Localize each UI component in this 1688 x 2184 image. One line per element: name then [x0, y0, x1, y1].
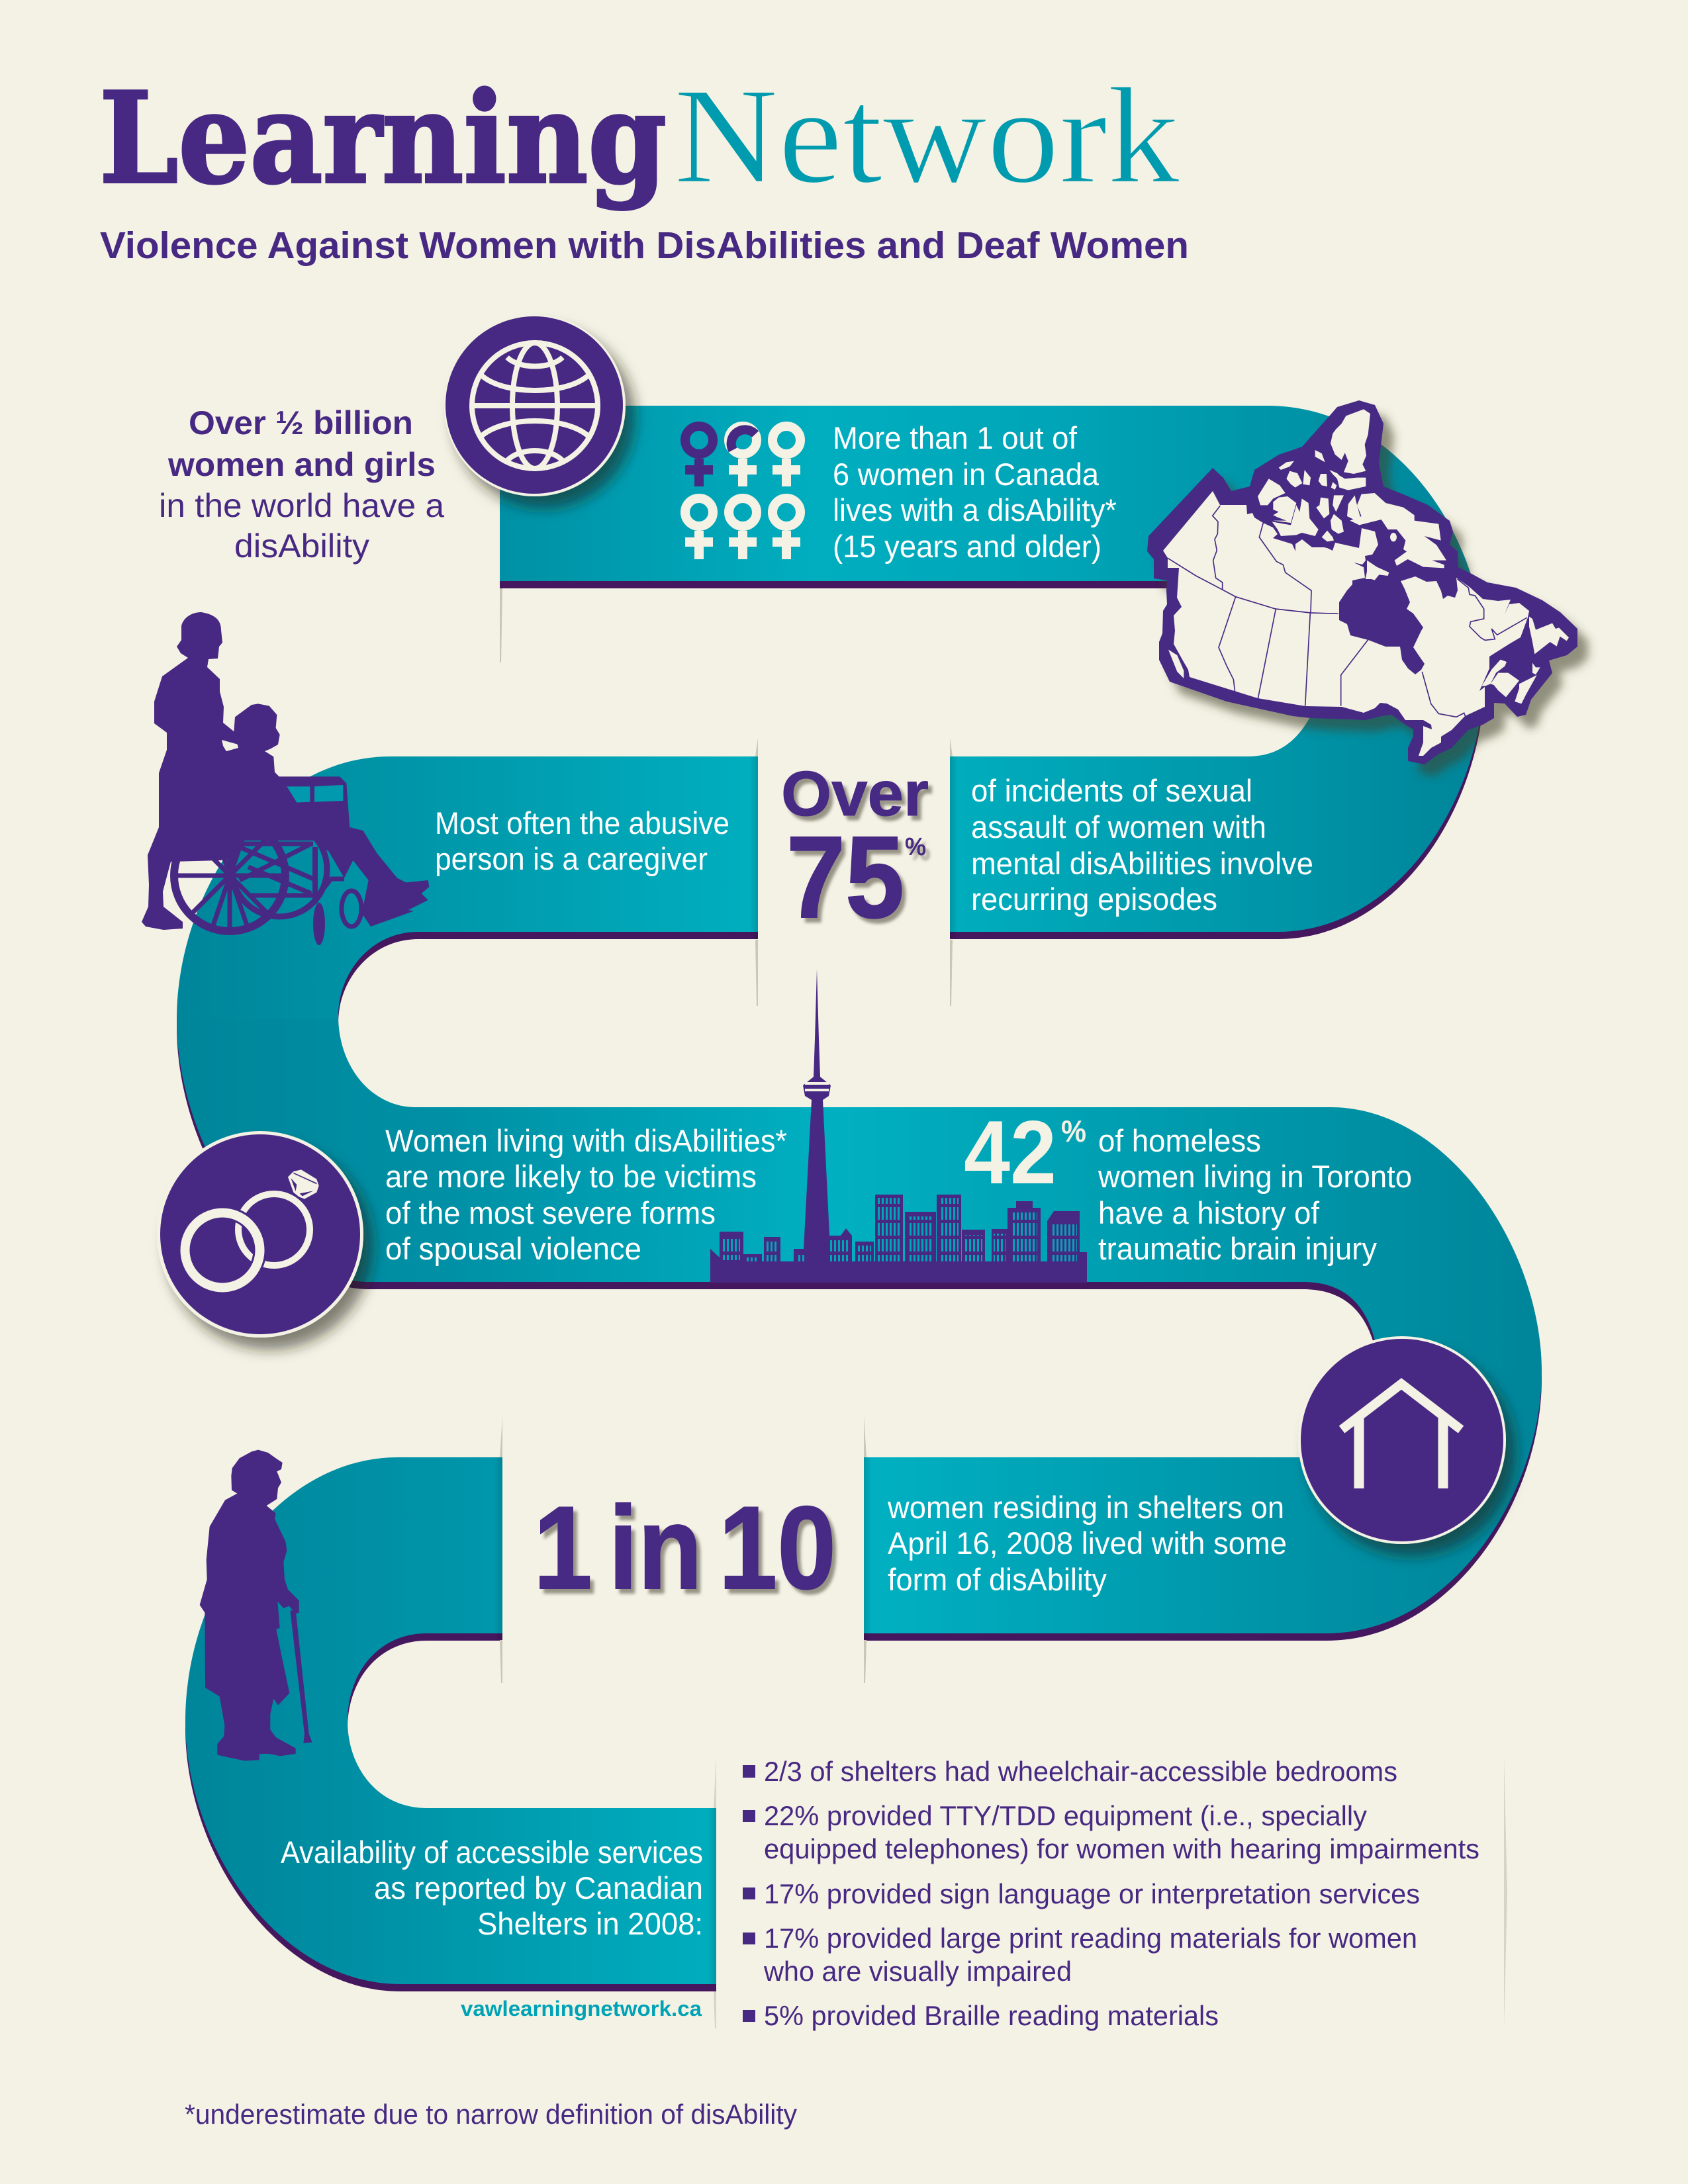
list: accessible services: 17% provided large print reading materials for women: [764, 1923, 1417, 1954]
text: abusive person is a caregiver: [435, 805, 729, 876]
text: spousal violence: [385, 1123, 787, 1266]
text: spousal violence: are more likely to be victims: [385, 1159, 757, 1194]
title: Learning: [99, 65, 667, 212]
text: sexual assault recurring episodes: recurring episodes: [971, 882, 1217, 917]
text: availability of accessible services: Shelters in 2008:: [477, 1906, 703, 1941]
text: sexual assault recurring episodes: of incidents of sexual: [971, 773, 1252, 808]
footnote: *underestimate due to narrow definition of disAbility: [185, 2099, 797, 2130]
intro text: half a billion women: women and girls: [167, 446, 436, 483]
text: homeless women in Toronto: of homeless: [1098, 1123, 1261, 1158]
paper cut column: 1 in 10: [494, 1416, 872, 1683]
shadow below first band: [500, 588, 502, 662]
text: women residing in shelters: April 16, 2008 lived with some: [888, 1525, 1287, 1561]
text: abusive person is a caregiver: Most often the abusive: [435, 805, 729, 841]
text: availability of accessible services: as reported by Canadian: [374, 1870, 703, 1905]
stat: 42 percent: %: [1061, 1114, 1086, 1148]
icon: six female symbols, one highlighted: [685, 426, 800, 559]
intro text: half a billion women: in the world have a: [159, 487, 444, 524]
paper cut column: services list: [708, 1757, 1507, 2028]
text: women residing in shelters: form of disAbility: [888, 1562, 1107, 1597]
text: homeless women in Toronto: traumatic brain injury: [1098, 1231, 1377, 1266]
paper cut column: over 75: [750, 738, 958, 1019]
text: abusive person is a caregiver: person is a caregiver: [435, 841, 708, 876]
title: [99, 60, 1180, 212]
caregiver: [142, 612, 238, 930]
list: accessible services: 2/3 of shelters had wheelchair-accessible bedrooms: [764, 1756, 1397, 1787]
text: sexual assault recurring episodes: mental disAbilities involve: [971, 846, 1313, 881]
text: sexual assault recurring episodes: [971, 773, 1313, 917]
text: homeless women in Toronto: women living in Toronto: [1098, 1159, 1412, 1194]
text: availability of accessible services: [281, 1835, 703, 1941]
text: homeless women in Toronto: have a history of: [1098, 1195, 1320, 1230]
text: spousal violence: of the most severe forms: [385, 1195, 716, 1230]
list: accessible services: 22% provided TTY/TDD equipment (i.e., specially: [764, 1800, 1367, 1831]
list: accessible services: who are visually impaired: [763, 1956, 1072, 1987]
silhouette: elderly woman with cane: [200, 1450, 312, 1761]
Toronto skyline and CN Tower: [710, 969, 1087, 1283]
text: sexual assault recurring episodes: assault of women with: [971, 809, 1266, 844]
list: accessible services: equipped telephones) for women with hearing impairments: [764, 1833, 1479, 1864]
list: accessible services: 17% provided sign language or interpretation services: [764, 1878, 1420, 1909]
icon: wedding rings: [157, 1131, 363, 1338]
list: accessible services: [743, 1756, 1479, 2031]
text: spousal violence: Women living with disAbilities*: [385, 1123, 787, 1158]
intro text: half a billion women: [159, 404, 444, 565]
stat: over 75 percent: Over: [781, 758, 929, 829]
text: homeless women in Toronto: [1098, 1123, 1412, 1266]
subtitle: Violence Against Women with DisAbilities and Deaf Women: [100, 224, 1189, 267]
text: availability of accessible services: Availability of accessible services: [281, 1835, 703, 1870]
intro text: half a billion women: Over ½ billion: [189, 404, 413, 441]
text: 1 out of 6 women in Canada: lives with a disAbility*: [833, 492, 1117, 527]
winding ribbon: [132, 397, 1589, 1999]
stat: over 75 percent: 75: [786, 813, 904, 942]
stat: over 75 percent: %: [905, 833, 926, 861]
icon: house: [1298, 1336, 1506, 1544]
text: spousal violence: of spousal violence: [385, 1231, 641, 1266]
stat: 42 percent: 42: [964, 1102, 1056, 1203]
text: 1 out of 6 women in Canada: (15 years and older): [833, 529, 1102, 564]
text: 1 out of 6 women in Canada: More than 1 out of: [833, 420, 1078, 455]
stat: over 75 percent: [781, 758, 929, 942]
seated woman and chair back: [223, 704, 429, 927]
text: 1 out of 6 women in Canada: [833, 420, 1117, 564]
stat: 1 in 10: 1 in 10: [534, 1482, 836, 1614]
icon: globe: [444, 315, 626, 496]
text: women residing in shelters: women residing in shelters on: [887, 1490, 1284, 1525]
title: Network: [674, 60, 1180, 212]
intro text: half a billion women: disAbility: [234, 527, 369, 565]
map of Canada: [1147, 400, 1577, 764]
silhouette: caregiver pushing woman in wheelchair: [142, 612, 429, 945]
text: 1 out of 6 women in Canada: 6 women in Canada: [833, 457, 1100, 492]
text: women residing in shelters: [887, 1490, 1287, 1597]
website link text: vawlearningnetwork.ca: [461, 1997, 702, 2021]
list: accessible services: 5% provided Braille reading materials: [764, 2000, 1219, 2031]
mainland Canada: [1163, 491, 1529, 756]
